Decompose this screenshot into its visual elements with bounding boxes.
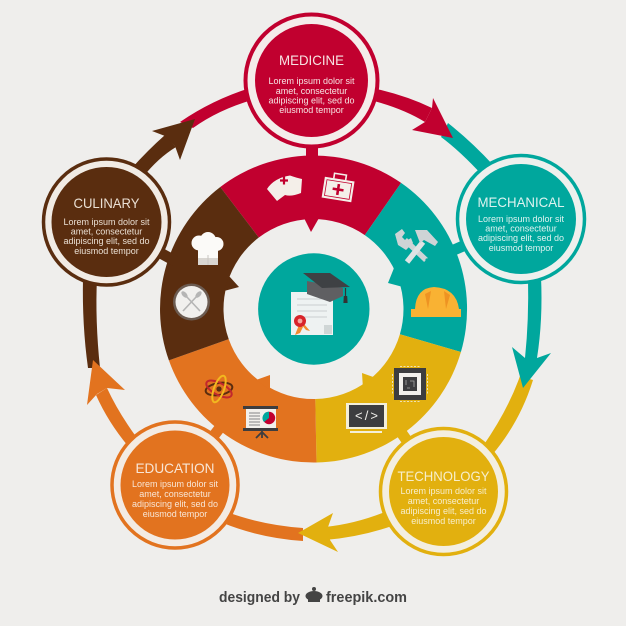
text block: technology: adipiscing elit, sed do	[400, 506, 487, 516]
text block: medicine: adipiscing elit, sed do	[268, 96, 355, 106]
text block: technology: amet, consectetur	[408, 496, 479, 506]
text block: medicine: amet, consectetur	[276, 86, 347, 96]
icon: chef hat	[192, 232, 224, 265]
segment: education	[169, 339, 316, 463]
center circle with diploma and cap	[258, 253, 369, 365]
icon: code monitor	[346, 403, 387, 433]
text block: education: eiusmod tempor	[143, 509, 207, 519]
circle: medicine	[246, 14, 378, 146]
circle: technology	[380, 428, 506, 554]
footer credit: freepik.com	[326, 590, 407, 606]
heading: technology: TECHNOLOGY	[398, 468, 490, 484]
arrow: mechanical to technology	[483, 277, 551, 455]
segment: medicine	[220, 146, 401, 238]
icon: diploma	[291, 292, 333, 335]
arrow: education to culinary	[83, 278, 137, 446]
text block: medicine: Lorem ipsum dolor sit	[268, 76, 355, 86]
text block: mechanical: amet, consectetur	[485, 224, 557, 234]
text block: culinary: eiusmod tempor	[74, 246, 139, 256]
arrows: outer cycle	[83, 88, 551, 552]
heading: education: EDUCATION	[136, 460, 214, 476]
text block: education: adipiscing elit, sed do	[132, 499, 218, 509]
icon: code monitor: </>	[355, 408, 378, 423]
circle: education	[112, 422, 238, 548]
icon: hard hat	[411, 287, 461, 317]
arrow: culinary to medicine	[131, 88, 252, 177]
segment: technology	[315, 334, 461, 462]
text block: culinary: amet, consectetur	[71, 226, 142, 236]
arrow: medicine to mechanical	[370, 88, 494, 176]
text block: culinary: adipiscing elit, sed do	[63, 236, 150, 246]
text block: mechanical: Lorem ipsum dolor sit	[478, 214, 565, 224]
heading: medicine: MEDICINE	[279, 52, 344, 68]
icon: atom	[204, 374, 234, 404]
circle: mechanical	[458, 156, 584, 282]
icon: first aid kit	[322, 172, 355, 202]
text block: technology: eiusmod tempor	[411, 516, 476, 526]
icon: presentation board	[243, 406, 278, 438]
segment: culinary	[152, 187, 259, 360]
arrow: technology to education	[223, 512, 392, 552]
central ring	[152, 146, 472, 463]
text block: mechanical: adipiscing elit, sed do	[478, 233, 564, 243]
circle: culinary	[44, 159, 170, 285]
text block: mechanical: eiusmod tempor	[489, 243, 553, 253]
text block: technology: Lorem ipsum dolor sit	[400, 486, 487, 496]
icon: nurse cap	[267, 176, 302, 201]
icon: freepik logo	[306, 587, 322, 602]
text block: education: Lorem ipsum dolor sit	[132, 479, 219, 489]
heading: mechanical: MECHANICAL	[478, 194, 565, 210]
segment: mechanical	[365, 183, 472, 352]
footer credit	[219, 587, 407, 606]
text block: culinary: Lorem ipsum dolor sit	[63, 217, 150, 227]
icon: graduation cap	[303, 273, 350, 303]
icon: microchip	[392, 366, 428, 402]
text block: medicine: eiusmod tempor	[279, 105, 344, 115]
icon: plate with spoon and fork	[173, 284, 210, 320]
icon: wrench and hammer	[395, 229, 438, 262]
footer credit: designed by	[219, 590, 300, 606]
heading: culinary: CULINARY	[74, 195, 140, 211]
text block: education: amet, consectetur	[139, 489, 211, 499]
